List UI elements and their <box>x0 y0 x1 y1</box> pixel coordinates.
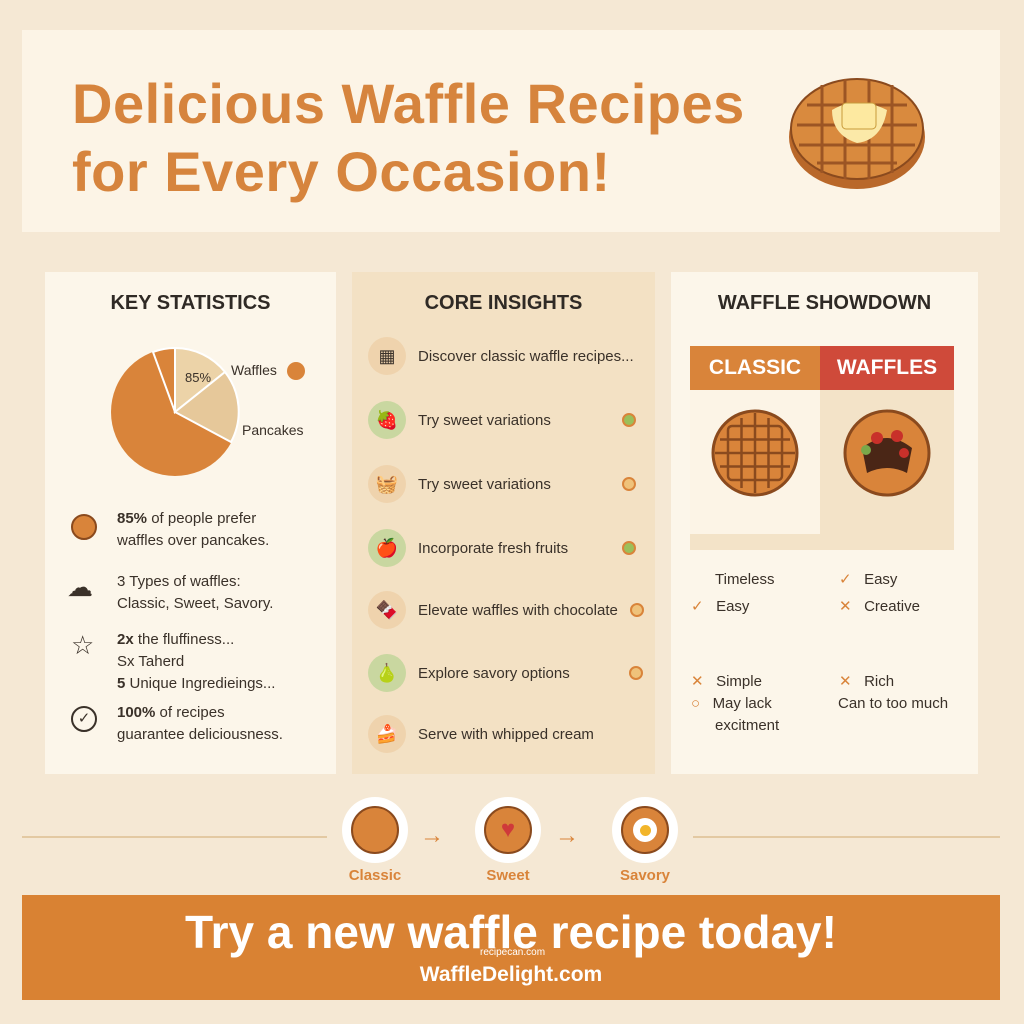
legend waffles: Waffles <box>231 362 277 378</box>
panel: waffle showdown <box>671 272 978 774</box>
timeline: sweet <box>475 797 541 884</box>
panel: waffle showdown: ✓ Easy <box>839 571 897 588</box>
heading: KEY STATISTICS <box>110 292 271 314</box>
panel: core insights: 🍫 <box>376 600 398 620</box>
panel: core insights: ▦ <box>378 346 396 366</box>
title <box>72 72 745 203</box>
panel: waffle showdown: excitment <box>715 717 779 734</box>
comparison table: CLASSIC <box>709 356 801 379</box>
panel: key statistics: Sx Taherd <box>117 653 184 670</box>
panel: core insights: Explore savory options <box>418 664 570 682</box>
stat 3: ☆ <box>71 630 94 660</box>
arrow: → <box>420 822 444 849</box>
panel: key statistics <box>45 272 336 774</box>
comparison table <box>690 346 954 550</box>
panel: key statistics: Classic, Sweet, Savory. <box>117 595 273 612</box>
header band <box>22 30 1000 232</box>
pie chart: 85% <box>185 370 211 385</box>
panel: waffle showdown: ✕ Creative <box>839 598 920 615</box>
panel: key statistics: 100% of recipes <box>117 704 225 721</box>
panel: waffle showdown: ✓ Easy <box>691 598 749 615</box>
panel: core insights: Try sweet variations <box>418 412 551 428</box>
panel: core insights: Elevate waffles with chocolate <box>418 602 618 618</box>
icon: waffle with butter <box>789 78 925 189</box>
timeline: classic <box>342 797 408 884</box>
timeline: savory: Savory <box>620 867 670 884</box>
panel: core insights: 🍓 <box>376 410 398 430</box>
panel: core insights: 🍰 <box>376 724 398 744</box>
comparison lists: Timeless <box>715 571 774 588</box>
heading: CORE INSIGHTS <box>425 292 582 314</box>
panel: waffle showdown: ○ May lack <box>691 695 772 712</box>
stat 4: ✓ <box>78 710 90 727</box>
legend pancakes: Pancakes <box>242 422 303 438</box>
heading: WAFFLE SHOWDOWN <box>718 292 931 314</box>
stat 2: ☁ <box>67 572 93 602</box>
footer banner: recipecan.com <box>480 947 545 958</box>
panel: core insights: Try sweet variations <box>418 476 551 492</box>
panel: core insights: Serve with whipped cream <box>418 726 594 742</box>
panel: key statistics: 2x the fluffiness... <box>117 631 234 648</box>
panel: key statistics: waffles over pancakes. <box>117 532 269 549</box>
timeline lines <box>22 836 327 838</box>
panel: core insights: Discover classic waffle recipes... <box>418 348 634 364</box>
pie chart <box>111 347 240 476</box>
panel: key statistics: 85% of people prefer <box>117 510 256 527</box>
call to action: Try a new waffle recipe today! <box>185 906 837 958</box>
panel: waffle showdown: ✕ Simple <box>691 673 762 690</box>
website: WaffleDelight.com <box>420 963 602 986</box>
comparison table: WAFFLES <box>837 356 937 379</box>
stat 1 <box>71 514 97 540</box>
panel: core insights: 🍎 <box>376 538 398 558</box>
panel: key statistics: 3 Types of waffles: <box>117 573 241 590</box>
title: Delicious Waffle Recipes <box>72 72 745 135</box>
stat 4 <box>71 706 97 732</box>
panel: key statistics: guarantee deliciousness. <box>117 726 283 743</box>
legend waffles <box>231 362 305 380</box>
panel: waffle showdown: Can to too much <box>838 695 948 712</box>
arrow: → <box>555 822 579 849</box>
panel: core insights: 🧺 <box>376 474 398 494</box>
timeline: classic: Classic <box>349 867 401 884</box>
panel: core insights <box>352 272 655 774</box>
panel: key statistics: 5 Unique Ingredieings... <box>117 675 275 692</box>
footer banner <box>22 895 1000 1000</box>
timeline: sweet: ♥ <box>501 816 515 843</box>
title: for Every Occasion! <box>72 140 611 203</box>
panel: core insights: Incorporate fresh fruits <box>418 540 568 556</box>
timeline: sweet: Sweet <box>486 867 530 884</box>
timeline: savory <box>612 797 678 884</box>
panel: core insights: 🍐 <box>376 662 398 682</box>
panel: waffle showdown: ✕ Rich <box>839 673 894 690</box>
